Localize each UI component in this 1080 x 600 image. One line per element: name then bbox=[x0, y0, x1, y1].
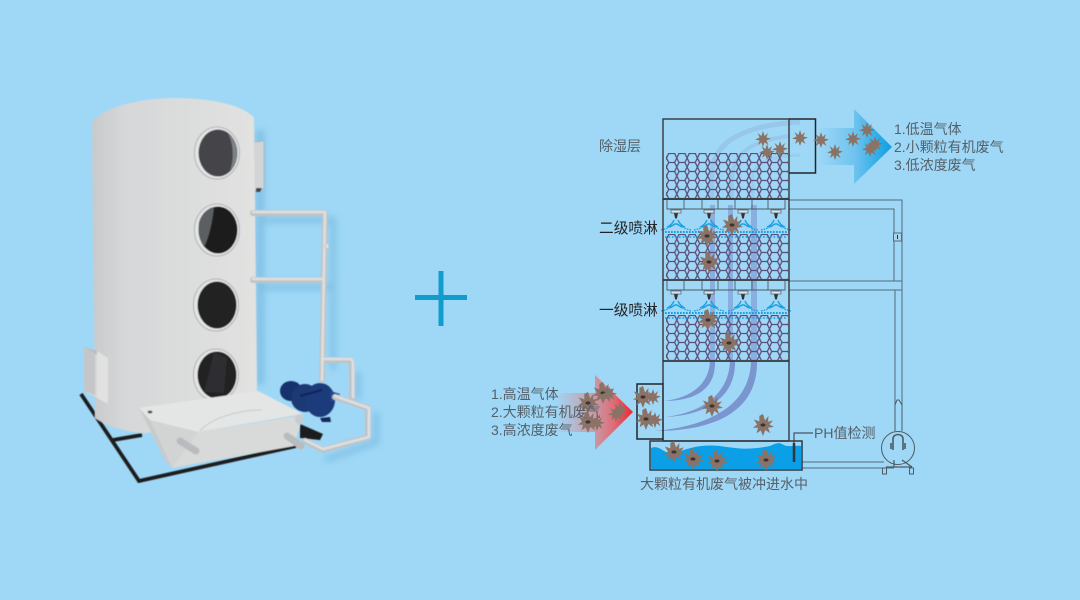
pH probe bbox=[794, 433, 813, 462]
text block: outlet gas properties: 1.低温气体 bbox=[894, 121, 962, 137]
particles: scrubber stages bbox=[697, 214, 774, 436]
frame corner under pump bbox=[300, 424, 323, 440]
text block: inlet gas properties: 3.高浓度废气 bbox=[491, 422, 573, 438]
tower shadow bbox=[258, 130, 376, 460]
label: second stage spray: 二级喷淋 bbox=[599, 220, 658, 237]
plus sign bbox=[415, 271, 467, 326]
base frame bbox=[81, 394, 296, 481]
tank drain nozzles bbox=[180, 441, 196, 451]
blue pump bbox=[280, 381, 340, 422]
pipe valve bbox=[325, 243, 329, 249]
text block: outlet gas properties: 2.小颗粒有机废气 bbox=[894, 139, 1004, 155]
particles: water tank bbox=[664, 441, 777, 472]
honeycomb packing: second stage bbox=[666, 234, 788, 279]
tower body bbox=[92, 98, 257, 433]
spray row: second stage bbox=[661, 200, 791, 237]
porthole 4 bbox=[194, 349, 238, 401]
white pipework bbox=[253, 212, 369, 450]
scrubber housing outlines bbox=[637, 119, 816, 441]
particles: demister and outlet bbox=[755, 122, 883, 160]
illustration: scrubber tower photo bbox=[81, 98, 376, 481]
air inlet duct bbox=[84, 347, 108, 404]
text block: inlet gas properties: 1.高温气体 bbox=[491, 386, 559, 402]
diagram: scrubber schematic bbox=[555, 109, 914, 474]
top side outlet bbox=[254, 141, 264, 191]
water tank bbox=[139, 391, 303, 468]
text block: inlet gas properties: 2.大颗粒有机废气 bbox=[491, 404, 601, 420]
honeycomb packing: demister bbox=[666, 153, 788, 198]
airflow streams bbox=[655, 122, 800, 431]
label: pH detection: PH值检测 bbox=[814, 425, 875, 441]
porthole 3 bbox=[194, 279, 238, 331]
circulation pump bbox=[882, 400, 914, 474]
left inlet arrow bbox=[555, 375, 633, 450]
spray row: first stage bbox=[661, 281, 791, 318]
text block: outlet gas properties: 3.低浓度废气 bbox=[894, 157, 976, 173]
text block: outlet gas properties bbox=[894, 121, 1004, 173]
honeycomb packing: first stage bbox=[666, 315, 788, 360]
right piping bbox=[789, 200, 902, 468]
text block: inlet gas properties bbox=[491, 386, 601, 438]
label: first stage spray: 一级喷淋 bbox=[599, 302, 658, 319]
particles: inlet bbox=[578, 382, 663, 433]
caption: tank: 大颗粒有机废气被冲进水中 bbox=[640, 476, 808, 492]
right outlet arrow bbox=[817, 109, 892, 184]
porthole 2 bbox=[194, 204, 240, 256]
water tank with waves bbox=[650, 441, 802, 470]
porthole 1 bbox=[194, 127, 240, 179]
label: demister layer: 除湿层 bbox=[599, 138, 641, 154]
